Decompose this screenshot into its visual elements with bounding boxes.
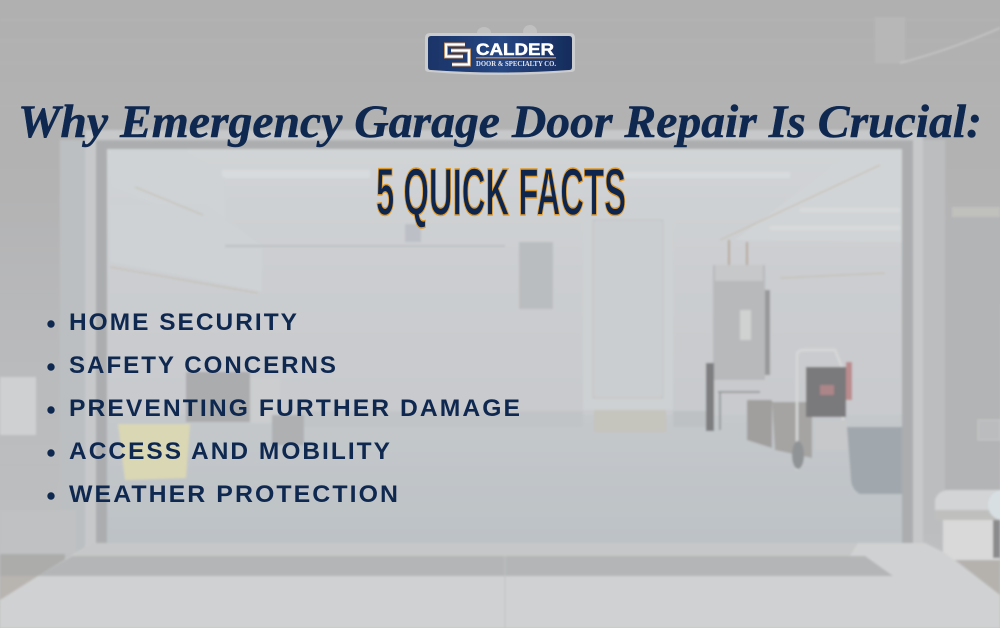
right shelf bracket [952, 207, 1000, 217]
right siding panel [945, 220, 1000, 490]
right column [923, 140, 945, 535]
paint cans on shelf [405, 224, 421, 242]
list item: home security: HOME SECURITY [69, 309, 299, 336]
logo tagline: DOOR & SPECIALTY CO. [476, 60, 556, 68]
list item: preventing further damage: PREVENTING FURTHER DAMAGE [69, 395, 522, 422]
logo name: CALDER [476, 40, 554, 59]
foundation left [0, 510, 76, 554]
list item: access and mobility: ACCESS AND MOBILITY [69, 438, 392, 465]
infographic canvas: 5 QUICK FACTS [376, 155, 626, 230]
list item: safety concerns: SAFETY CONCERNS [69, 352, 338, 379]
door frame [85, 130, 923, 548]
outlet right [978, 420, 1000, 440]
foundation right [935, 490, 1000, 510]
dark garage items left [186, 372, 250, 422]
logo mark [446, 44, 469, 64]
gravel right [956, 560, 1000, 595]
logo plate [425, 33, 575, 75]
storage bins [747, 400, 772, 448]
left column [60, 140, 85, 550]
garage floor [107, 415, 902, 545]
siding lines [0, 20, 1000, 498]
ceiling and upper shelves [222, 170, 370, 178]
logo: Calder Door & Specialty Co. [425, 25, 575, 75]
white box on left wall [0, 377, 36, 435]
bullet list [47, 309, 522, 508]
pressure washer [792, 350, 852, 470]
trash can [847, 427, 902, 494]
ground shadow left [0, 554, 65, 576]
threshold bands [72, 543, 858, 556]
baseboard [300, 411, 583, 427]
garage interior [107, 149, 902, 415]
water heater [713, 240, 770, 380]
title: Why Emergency Garage Door Repair Is Crucial: [18, 96, 982, 148]
door mat [594, 410, 666, 432]
lamp right [988, 490, 1000, 520]
gravel left [0, 576, 38, 600]
meter box top right [875, 17, 905, 63]
interior door [583, 210, 673, 410]
table and post [706, 363, 714, 431]
yellow bin [118, 424, 190, 480]
list item: weather protection: WEATHER PROTECTION [69, 481, 400, 508]
logo halo bumps [477, 27, 491, 39]
driveway [0, 543, 1000, 628]
electrical panel [519, 242, 553, 309]
logo rule [476, 57, 556, 58]
